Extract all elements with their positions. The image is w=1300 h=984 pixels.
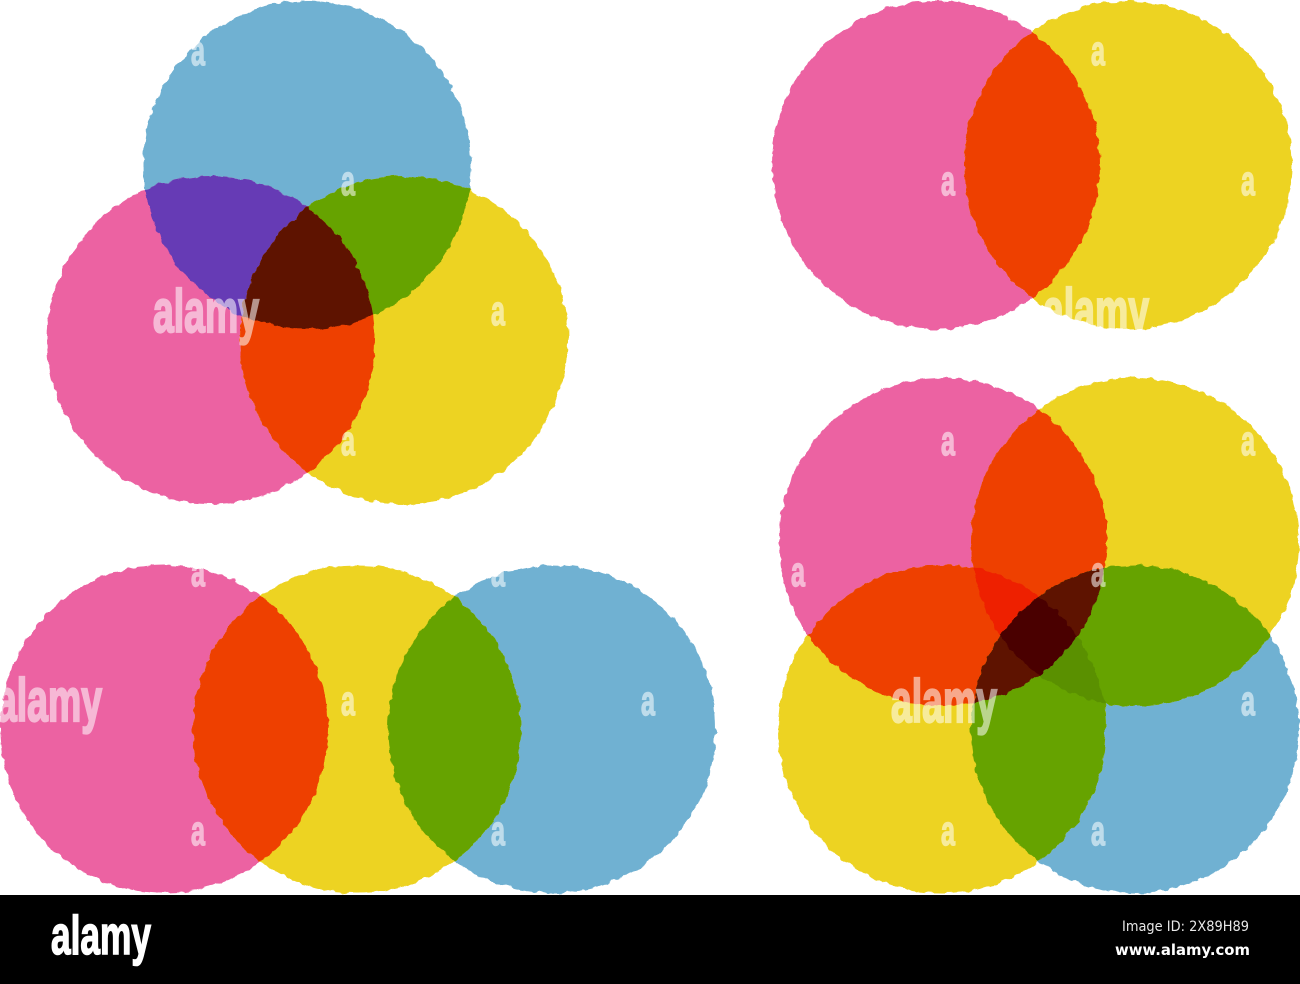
overlap: lower green (970, 636, 1106, 861)
watermark letters: a (791, 548, 805, 595)
pink circle (0, 565, 328, 893)
footer logo: alamy (51, 904, 151, 966)
three-in-a-row venn diagram (0, 565, 716, 893)
overlap: left orange (807, 564, 1000, 706)
watermark letters: a (491, 807, 505, 854)
overlap: dark centre (242, 206, 373, 330)
watermark logos: alamy (0, 667, 102, 734)
two-circle venn diagram (772, 1, 1292, 329)
watermark letters: a (941, 417, 955, 464)
three-circle venn diagram (47, 1, 568, 504)
four-circle venn diagram (778, 378, 1299, 893)
pink circle (779, 378, 1107, 706)
watermark letters: a (1091, 27, 1105, 74)
watermark letters: a (191, 807, 205, 854)
watermark letters: a (491, 548, 505, 595)
watermark logos (0, 277, 1149, 735)
lower yellow circle (778, 565, 1106, 893)
overlap: green (387, 596, 522, 862)
overlap: darkest centre (1000, 597, 1077, 676)
overlap: dark lens (974, 568, 1104, 704)
watermark letters: a (1091, 807, 1105, 854)
overlap: orange (964, 32, 1102, 298)
yellow circle (964, 1, 1292, 329)
yellow circle (240, 176, 568, 504)
pink circle (772, 1, 1100, 329)
watermark letters: a (191, 548, 205, 595)
website: www.alamy.com (1115, 941, 1250, 959)
watermark letters (191, 27, 1255, 854)
watermark letters: a (191, 27, 205, 74)
upper yellow circle (971, 378, 1299, 706)
watermark letters: a (1241, 157, 1255, 204)
watermark logos: alamy (153, 278, 259, 345)
overlap: green (242, 174, 471, 314)
overlap: red wedge (973, 568, 1038, 636)
image id: Image ID: 2X89H89 (1122, 919, 1249, 935)
watermark letters: a (941, 157, 955, 204)
watermark letters: a (341, 157, 355, 204)
blue circle (388, 565, 716, 893)
watermark letters: a (491, 287, 505, 334)
watermark letters: a (1241, 677, 1255, 724)
watermark logos: alamy (891, 668, 997, 735)
overlap: orange (192, 596, 330, 862)
watermark letters: a (641, 677, 655, 724)
watermark letters: a (1091, 548, 1105, 595)
watermark letters: a (341, 417, 355, 464)
watermark letters: a (341, 677, 355, 724)
overlap: right green (1038, 564, 1270, 707)
footer bar (0, 895, 1300, 984)
overlap: dark green wedge (1000, 597, 1106, 704)
blue circle (971, 565, 1299, 893)
watermark letters: a (1241, 417, 1255, 464)
overlap: purple (145, 175, 308, 316)
overlap: upper orange (970, 410, 1108, 597)
blue circle (143, 1, 471, 329)
watermark letters: a (941, 807, 955, 854)
pink circle (47, 176, 375, 504)
overlap: orange (239, 206, 376, 473)
yellow circle (193, 565, 521, 893)
watermark logos: alamy (1043, 277, 1149, 344)
